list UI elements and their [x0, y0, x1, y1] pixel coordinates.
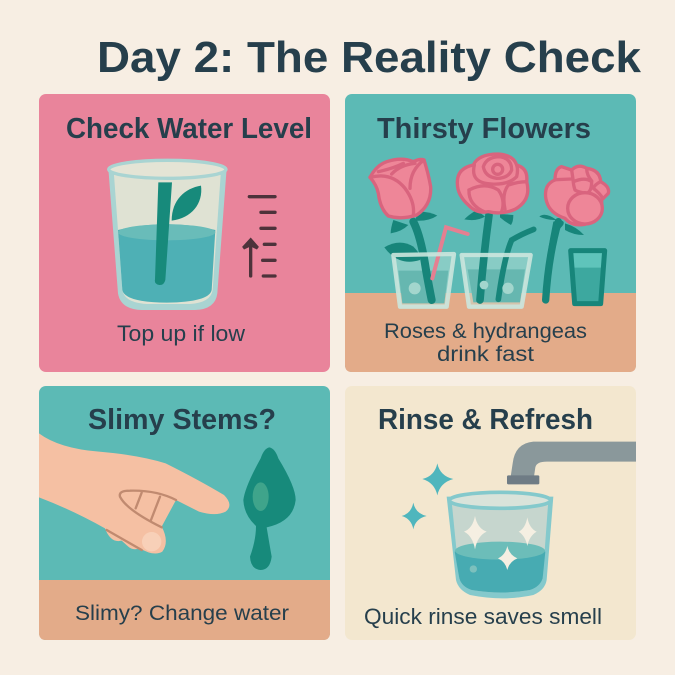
rose two	[457, 154, 528, 213]
panel: slimy stems	[39, 386, 330, 640]
icon: glass with water	[447, 492, 553, 598]
caption: quick rinse: Quick rinse saves smell	[364, 604, 602, 629]
panel: rinse and refresh	[345, 386, 636, 640]
stems and leaves	[384, 210, 558, 300]
glass rims and bubbles	[393, 254, 531, 307]
icon: tap	[507, 442, 636, 484]
panel: thirsty flowers: drink fast	[437, 343, 534, 366]
rose three with third glass	[539, 166, 609, 304]
icon: measuring scale	[243, 197, 275, 276]
icon: slime drop	[243, 447, 296, 570]
heading: thirsty flowers: Thirsty Flowers	[377, 113, 591, 145]
heading: rinse and refresh: Rinse & Refresh	[378, 404, 593, 436]
icon: glass with stem	[108, 160, 227, 310]
title: Day 2: The Reality Check	[97, 33, 642, 82]
icon: sparkles	[402, 463, 453, 529]
glass fills	[393, 254, 531, 308]
heading: check water level: Check Water Level	[66, 113, 312, 145]
panel: check water level	[39, 94, 330, 372]
caption: top up if low: Top up if low	[117, 321, 245, 346]
heading: slimy stems: Slimy Stems?	[88, 404, 276, 436]
panel: thirsty flowers	[345, 94, 636, 372]
straws	[432, 227, 534, 299]
caption: slimy change water: Slimy? Change water	[75, 602, 289, 625]
icon: pointing hand	[39, 433, 229, 554]
icon: three roses in glasses	[370, 154, 609, 308]
rose one	[370, 159, 437, 233]
caption: roses and hydrangeas: Roses & hydrangeas	[384, 320, 587, 343]
